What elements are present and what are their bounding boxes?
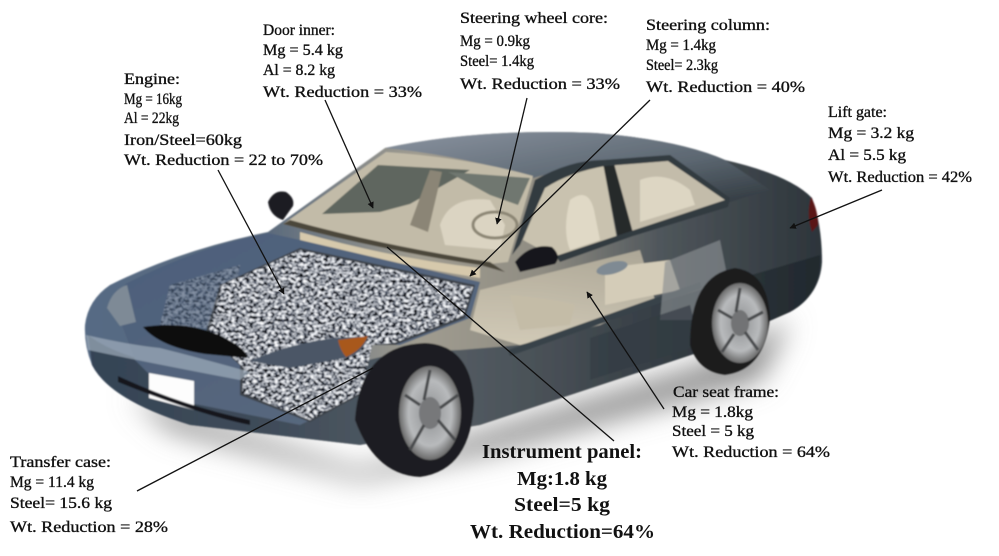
far side mirror [268,191,293,220]
label: steering wheel core: Steering wheel core: [460,10,608,27]
front bumper highlight [86,335,250,380]
label: steering wheel core: Mg = 0.9kg [460,33,530,50]
label: car seat frame: Mg = 1.8kg [672,404,753,421]
leader line: lift gate [790,190,882,228]
label: transfer case: Steel= 15.6 kg [10,495,112,512]
headlight [250,337,368,368]
leader line: car seat frame [587,292,664,409]
label: steering column: Steering column: [646,17,770,34]
label: transfer case: Wt. Reduction = 28% [10,519,168,536]
label: transfer case: Transfer case: [10,454,111,471]
leader line: transfer case [137,368,373,491]
lower grille [118,376,250,425]
grille [143,325,247,358]
label: engine: Wt. Reduction = 22 to 70% [124,152,323,169]
label: transfer case: Mg = 11.4 kg [10,474,94,491]
faint engine see-through on hood [160,265,240,330]
label: steering wheel core [460,10,620,93]
label: car seat frame: Steel = 5 kg [672,423,754,440]
leader line: steering column [470,100,650,276]
label: door inner: Al = 8.2 kg [263,62,335,79]
label: lift gate: Al = 5.5 kg [828,147,906,164]
label: steering column: Mg = 1.4kg [646,37,716,54]
label: steering column: Wt. Reduction = 40% [646,79,805,96]
left headlight [107,285,136,326]
label: engine: Al = 22kg [124,110,179,127]
engine detail texture [208,250,473,420]
label: engine: Mg = 16kg [124,91,182,108]
label: instrument panel: Steel=5 kg [514,494,610,516]
front seat and door interior [470,250,702,356]
label: transfer case [10,454,168,536]
leader line: door inner [325,100,373,208]
label: car seat frame: Car seat frame: [673,384,779,401]
label: door inner [263,22,422,101]
front wheel [355,343,474,477]
label: instrument panel: Mg:1.8 kg [517,468,607,490]
label: instrument panel: Instrument panel: [482,441,642,463]
label: steering column [646,17,805,96]
leader line: engine [218,170,284,294]
label: car seat frame: Wt. Reduction = 64% [672,444,830,461]
side windows and seats [512,155,730,262]
label: instrument panel: Wt. Reduction=64% [470,521,655,543]
label: lift gate: Wt. Reduction = 42% [828,169,972,186]
rear door lower [590,305,700,380]
label: steering wheel core: Wt. Reduction = 33% [460,76,620,93]
label: engine: Engine: [124,71,180,88]
label: engine: Iron/Steel=60kg [124,132,242,149]
rear suspension cutaway [660,240,730,320]
label: steering wheel core: Steel= 1.4kg [460,53,534,70]
license plate [149,373,194,410]
leader line: steering wheel core [497,98,527,224]
label: engine [124,71,323,169]
taillight [809,197,818,232]
car illustration [85,132,822,480]
label: lift gate [828,104,972,186]
rear wheel [690,268,770,375]
label: car seat frame [672,384,830,461]
label: lift gate: Mg = 3.2 kg [828,125,914,142]
label: door inner: Door inner: [263,22,335,39]
leader line: instrument panel [387,247,614,441]
hood panel [120,233,480,425]
label: door inner: Wt. Reduction = 33% [263,84,422,101]
label: instrument panel [470,441,655,543]
ground shadow [130,320,790,480]
label: lift gate: Lift gate: [828,104,887,121]
windshield interior [283,152,533,278]
turn signal [338,336,368,357]
car body [85,132,822,445]
roof [385,132,770,203]
label: door inner: Mg = 5.4 kg [263,42,343,59]
label: steering column: Steel= 2.3kg [646,57,718,74]
lower body sill [88,255,820,445]
side mirror [515,246,558,272]
engine bay dark base [205,248,475,422]
